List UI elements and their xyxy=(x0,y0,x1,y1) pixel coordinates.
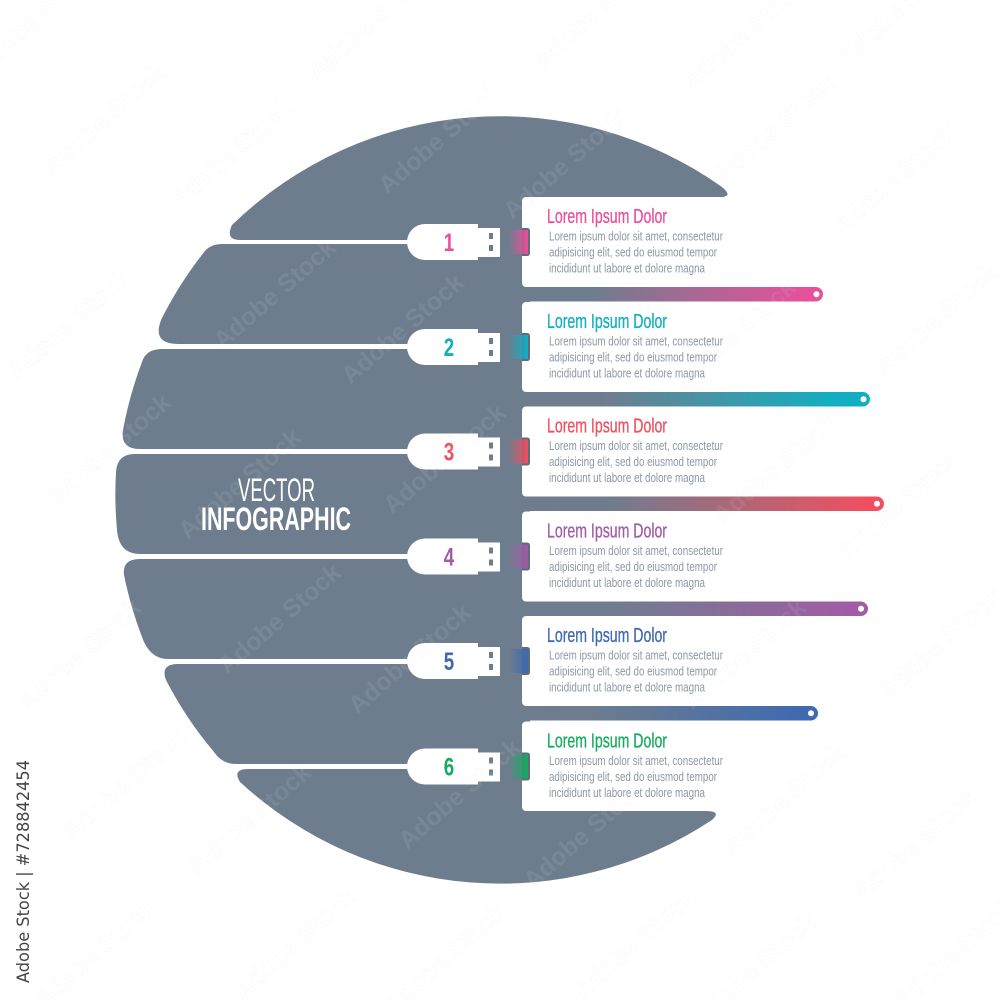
watermark pattern: Adobe Stock xyxy=(183,758,317,880)
heading 4: Lorem Ipsum Dolor xyxy=(547,520,667,542)
body 5: incididunt ut labore et dolore magna xyxy=(549,680,706,694)
watermark pattern: Adobe Stock xyxy=(336,268,470,390)
body 2: adipisicing elit, sed do eiusmod tempor xyxy=(549,350,717,364)
watermark pattern: Adobe Stock xyxy=(828,118,962,240)
watermark pattern: Adobe Stock xyxy=(13,593,147,715)
stock id side label: Adobe Stock | #728842454 xyxy=(14,760,34,983)
watermark pattern: Adobe Stock xyxy=(498,103,632,225)
title: vector infographic: VECTOR xyxy=(238,472,315,508)
number 6: 6 xyxy=(444,753,454,781)
socket 6 xyxy=(508,752,530,780)
body 3 xyxy=(549,438,723,485)
watermark pattern: Adobe Stock xyxy=(708,408,842,530)
item 6 xyxy=(407,722,723,811)
watermark pattern: Adobe Stock xyxy=(870,258,1000,380)
body 3: Lorem ipsum dolor sit amet, consectetur xyxy=(549,438,723,453)
text box 2 xyxy=(522,302,760,392)
body 2 xyxy=(549,334,723,380)
watermark pattern: Adobe Stock xyxy=(373,78,507,200)
usb plug 4 xyxy=(407,538,500,574)
title: vector infographic xyxy=(201,472,351,537)
body 4 xyxy=(549,543,723,590)
watermark pattern: Adobe Stock xyxy=(518,773,652,895)
watermark pattern: Adobe Stock xyxy=(848,783,982,905)
watermark pattern: Adobe Stock xyxy=(208,233,342,355)
socket 5 xyxy=(508,647,530,675)
item 5 xyxy=(407,616,818,720)
body 3: incididunt ut labore et dolore magna xyxy=(549,470,706,485)
usb plug 5 xyxy=(407,643,500,679)
watermark pattern: Adobe Stock xyxy=(393,733,527,855)
bar 2 xyxy=(515,392,870,406)
watermark pattern: Adobe Stock xyxy=(58,723,192,845)
watermark pattern: Adobe Stock xyxy=(708,68,842,190)
body 4: adipisicing elit, sed do eiusmod tempor xyxy=(549,559,717,574)
body 4: incididunt ut labore et dolore magna xyxy=(549,575,706,590)
socket 1 xyxy=(508,228,530,256)
text box 3 xyxy=(522,406,760,496)
body 2: incididunt ut labore et dolore magna xyxy=(549,366,706,380)
heading 3: Lorem Ipsum Dolor xyxy=(547,416,667,438)
number 5: 5 xyxy=(444,647,454,676)
socket 3 xyxy=(508,438,530,466)
body 6: Lorem ipsum dolor sit amet, consectetur xyxy=(549,753,723,768)
body 1: adipisicing elit, sed do eiusmod tempor xyxy=(549,244,717,260)
watermark pattern: Adobe Stock xyxy=(3,263,137,385)
usb plug 2 xyxy=(407,329,500,365)
body 6: incididunt ut labore et dolore magna xyxy=(549,785,706,800)
watermark pattern: Adobe Stock xyxy=(668,273,802,395)
number 2: 2 xyxy=(444,333,454,362)
body 4: Lorem ipsum dolor sit amet, consectetur xyxy=(549,543,723,558)
usb plug 1 xyxy=(407,224,500,260)
body 1 xyxy=(549,228,723,276)
watermark pattern: Adobe Stock xyxy=(165,93,299,215)
body 5: Lorem ipsum dolor sit amet, consectetur xyxy=(549,648,723,662)
watermark pattern: Adobe Stock xyxy=(38,58,172,180)
body 3: adipisicing elit, sed do eiusmod tempor xyxy=(549,454,717,469)
body 5 xyxy=(549,648,723,694)
watermark pattern: Adobe Stock xyxy=(718,738,852,860)
title: vector infographic: INFOGRAPHIC xyxy=(201,501,351,537)
body 6 xyxy=(549,753,723,800)
watermark pattern: Adobe Stock xyxy=(43,388,177,510)
usb plug 3 xyxy=(407,434,500,470)
watermark pattern: Adobe Stock xyxy=(678,593,812,715)
body 2: Lorem ipsum dolor sit amet, consectetur xyxy=(549,334,723,348)
item 2 xyxy=(407,302,870,406)
bar 1 xyxy=(515,287,823,302)
socket 4 xyxy=(508,542,530,570)
item 4 xyxy=(407,512,868,616)
body 1: Lorem ipsum dolor sit amet, consectetur xyxy=(549,228,723,244)
text box 1 xyxy=(522,197,760,287)
number 3: 3 xyxy=(444,438,454,466)
watermark pattern: Adobe Stock xyxy=(343,598,477,720)
watermark pattern: Adobe Stock xyxy=(833,443,967,565)
heading 6: Lorem Ipsum Dolor xyxy=(547,730,667,752)
watermark pattern: Adobe Stock xyxy=(213,558,347,680)
bar 5 xyxy=(515,706,818,720)
watermark pattern: Adobe Stock xyxy=(378,398,512,520)
text box 6 xyxy=(522,722,700,811)
bar 3 xyxy=(515,496,884,511)
number 1: 1 xyxy=(444,228,454,257)
circle divided into grey segments xyxy=(115,116,728,884)
text box 5 xyxy=(522,616,760,706)
item 1 xyxy=(407,197,823,302)
body 5: adipisicing elit, sed do eiusmod tempor xyxy=(549,664,717,678)
number 4: 4 xyxy=(444,543,455,571)
item 3 xyxy=(407,406,884,511)
watermark pattern: Adobe Stock xyxy=(173,423,307,545)
heading 2: Lorem Ipsum Dolor xyxy=(547,311,667,333)
bar 4 xyxy=(515,602,868,616)
body 6: adipisicing elit, sed do eiusmod tempor xyxy=(549,769,717,784)
heading 5: Lorem Ipsum Dolor xyxy=(547,625,667,647)
socket 2 xyxy=(508,333,530,361)
usb plug 6 xyxy=(407,748,500,784)
body 1: incididunt ut labore et dolore magna xyxy=(549,260,706,276)
text box 4 xyxy=(522,512,760,602)
heading 1: Lorem Ipsum Dolor xyxy=(547,206,667,228)
